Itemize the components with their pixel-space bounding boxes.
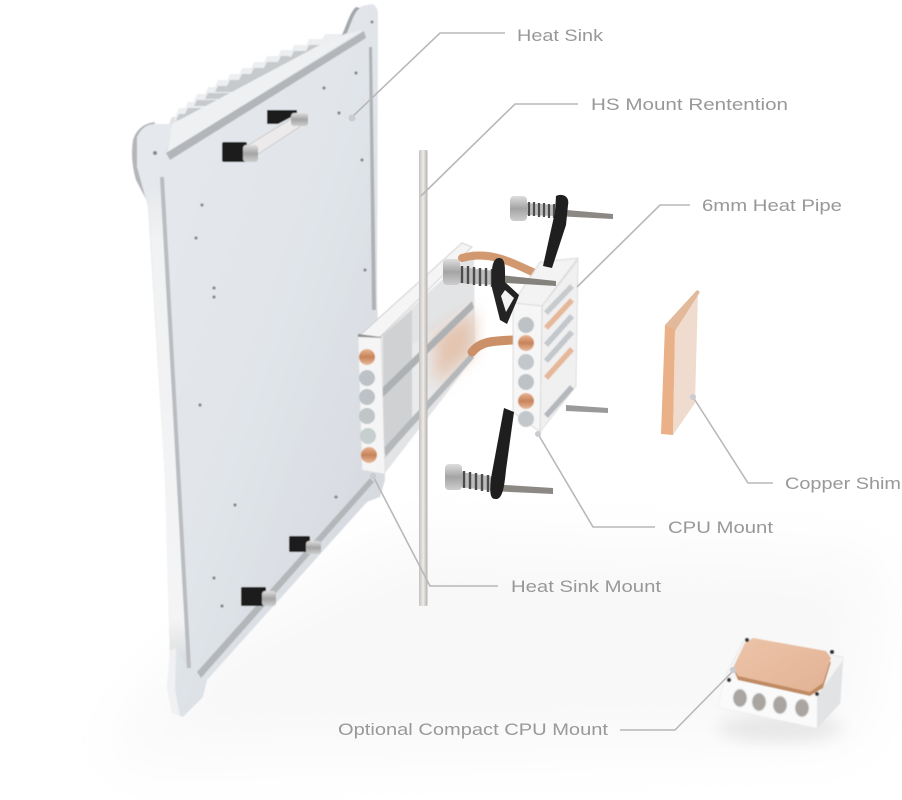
CPU mount side frame xyxy=(540,260,578,432)
CPU mount pipe holes xyxy=(518,317,534,427)
callout: Copper Shim: Copper Shim xyxy=(785,474,901,493)
callout: Optional Compact CPU Mount xyxy=(338,667,736,739)
top strip above groove xyxy=(168,30,363,152)
heat pipes xyxy=(462,255,537,352)
callout: Heat Sink Mount xyxy=(370,473,661,596)
callout: 6mm Heat Pipe xyxy=(577,196,842,287)
shim face xyxy=(673,292,698,435)
callout: Heat Sink Mount: Heat Sink Mount xyxy=(511,577,661,596)
callout: CPU Mount: CPU Mount xyxy=(668,518,773,537)
heat sink xyxy=(132,4,385,717)
mount front face xyxy=(358,337,385,474)
spring screw: middle xyxy=(443,258,556,324)
shim top bevel xyxy=(665,290,700,331)
bottom ear lip xyxy=(167,648,180,716)
compact copper plate xyxy=(733,662,831,696)
callout: HS Mount Rentention: HS Mount Rentention xyxy=(591,95,788,114)
CPU mount xyxy=(513,258,578,432)
plate face xyxy=(137,4,385,717)
spring screw: lower xyxy=(445,408,553,499)
CPU mount front face xyxy=(513,303,542,432)
compact mount shadow xyxy=(718,714,842,742)
left bright band xyxy=(148,180,189,668)
optional compact CPU mount xyxy=(718,638,843,728)
callout: CPU Mount xyxy=(535,431,773,537)
plate side edge xyxy=(132,122,160,207)
heat pipe slots xyxy=(546,286,572,416)
callout: HS Mount Rentention xyxy=(421,95,788,196)
retention rod xyxy=(419,150,428,606)
heat sink fins xyxy=(167,34,347,129)
floor shadow xyxy=(100,540,880,760)
heat sink mount xyxy=(358,243,475,474)
top ear concave edge xyxy=(342,7,360,35)
callout: Optional Compact CPU Mount: Optional Compact CPU Mount xyxy=(338,720,608,739)
mount rails xyxy=(380,301,474,398)
top mounting bar xyxy=(222,110,308,162)
spring screw: top xyxy=(510,195,613,268)
CPU mount top face xyxy=(513,258,578,306)
copper reflection xyxy=(435,310,474,385)
bottom mounting bolts xyxy=(241,536,321,606)
screw holes xyxy=(153,20,374,608)
callout: Copper Shim xyxy=(690,394,901,493)
callout: Heat Sink xyxy=(348,26,604,122)
callout: 6mm Heat Pipe: 6mm Heat Pipe xyxy=(702,196,842,215)
compact corner screws xyxy=(727,638,834,696)
mount pipe holes xyxy=(359,349,377,463)
shim edge xyxy=(661,325,675,435)
copper shim xyxy=(661,290,700,435)
compact mount body xyxy=(718,638,843,728)
callout: Heat Sink: Heat Sink xyxy=(517,26,604,45)
grooves xyxy=(166,31,366,160)
compact mount holes xyxy=(733,689,809,717)
mount body xyxy=(380,250,475,473)
lower right pin xyxy=(566,405,608,413)
